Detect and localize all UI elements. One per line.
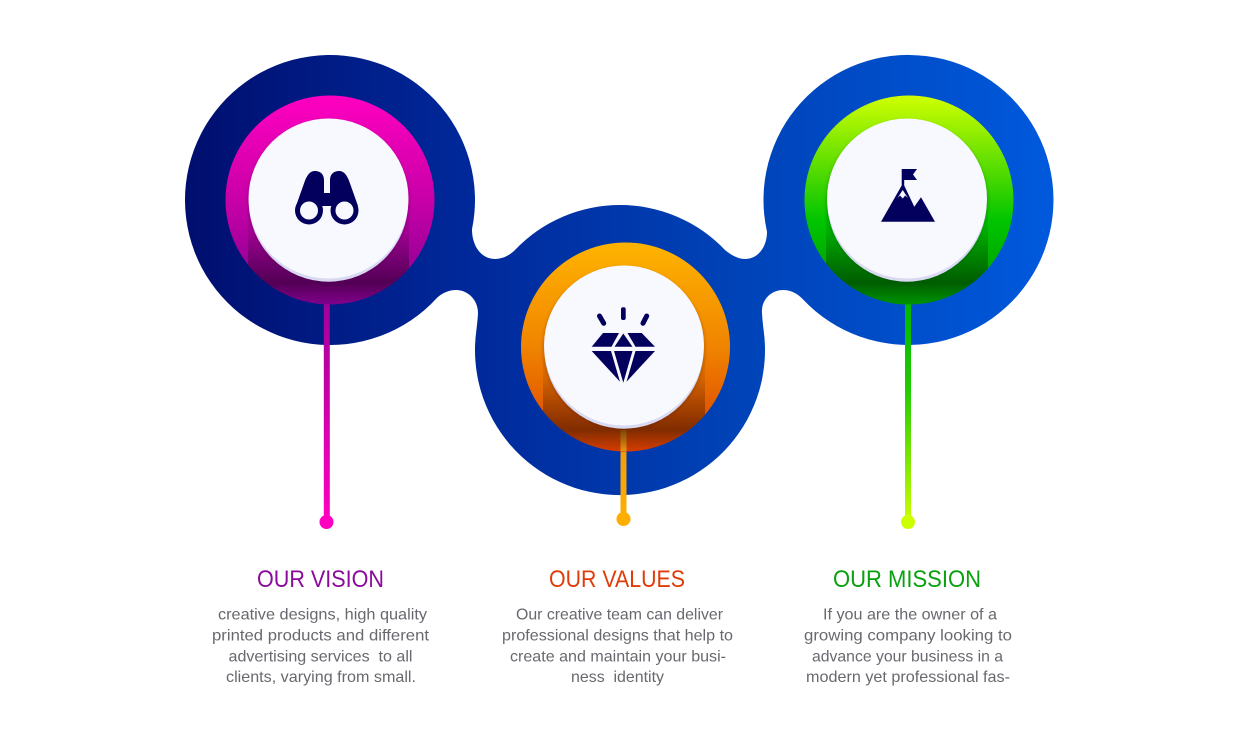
body: our vision: creative designs, high quality: [218, 606, 427, 624]
body: our vision: clients, varying from small.: [226, 669, 416, 686]
body: our mission: modern yet professional fas-: [806, 669, 1010, 686]
inner disc: vision: [248, 118, 408, 282]
ring: vision: [226, 96, 434, 304]
body: our values: create and maintain your busi-: [510, 648, 726, 666]
icon: diamond: [592, 307, 655, 383]
panel: vision node: [226, 96, 434, 529]
ring: values: [521, 242, 730, 452]
ring: mission: [804, 96, 1014, 304]
stem and dot: vision: [320, 296, 334, 529]
body: our vision: printed products and different: [212, 628, 430, 644]
icon: mountain with flag: [881, 169, 935, 222]
panel: values node: [521, 242, 730, 526]
body: our values: professional designs that help to: [502, 628, 733, 644]
ring shadow: vision: [248, 220, 409, 302]
ring shadow: mission: [826, 218, 988, 302]
heading: our mission: OUR MISSION: [833, 566, 981, 593]
text block: our vision: [212, 566, 430, 686]
text block: our values: [502, 566, 733, 686]
inner disc: mission: [827, 118, 987, 282]
panel: mission node: [804, 96, 1014, 529]
body: our values: Our creative team can deliver: [516, 606, 724, 624]
body: our mission: advance your business in a: [812, 648, 1003, 666]
body: our mission: [804, 606, 1012, 686]
icon: binoculars: [295, 171, 358, 224]
connected blue background shape: [185, 55, 1053, 495]
inner disc: values: [544, 266, 704, 429]
body: our vision: [212, 606, 430, 686]
heading: our vision: OUR VISION: [257, 566, 384, 593]
heading: our values: OUR VALUES: [549, 566, 685, 593]
body: our mission: growing company looking to: [804, 628, 1012, 644]
body: our values: [502, 606, 733, 686]
text block: our mission: [804, 566, 1012, 686]
body: our vision: advertising services to all: [228, 648, 412, 666]
body: our mission: If you are the owner of a: [823, 606, 997, 624]
stem and dot: values: [616, 430, 630, 526]
body: our values: ness identity: [571, 669, 664, 686]
ring shadow: values: [543, 364, 705, 450]
stem and dot: mission: [901, 296, 915, 529]
